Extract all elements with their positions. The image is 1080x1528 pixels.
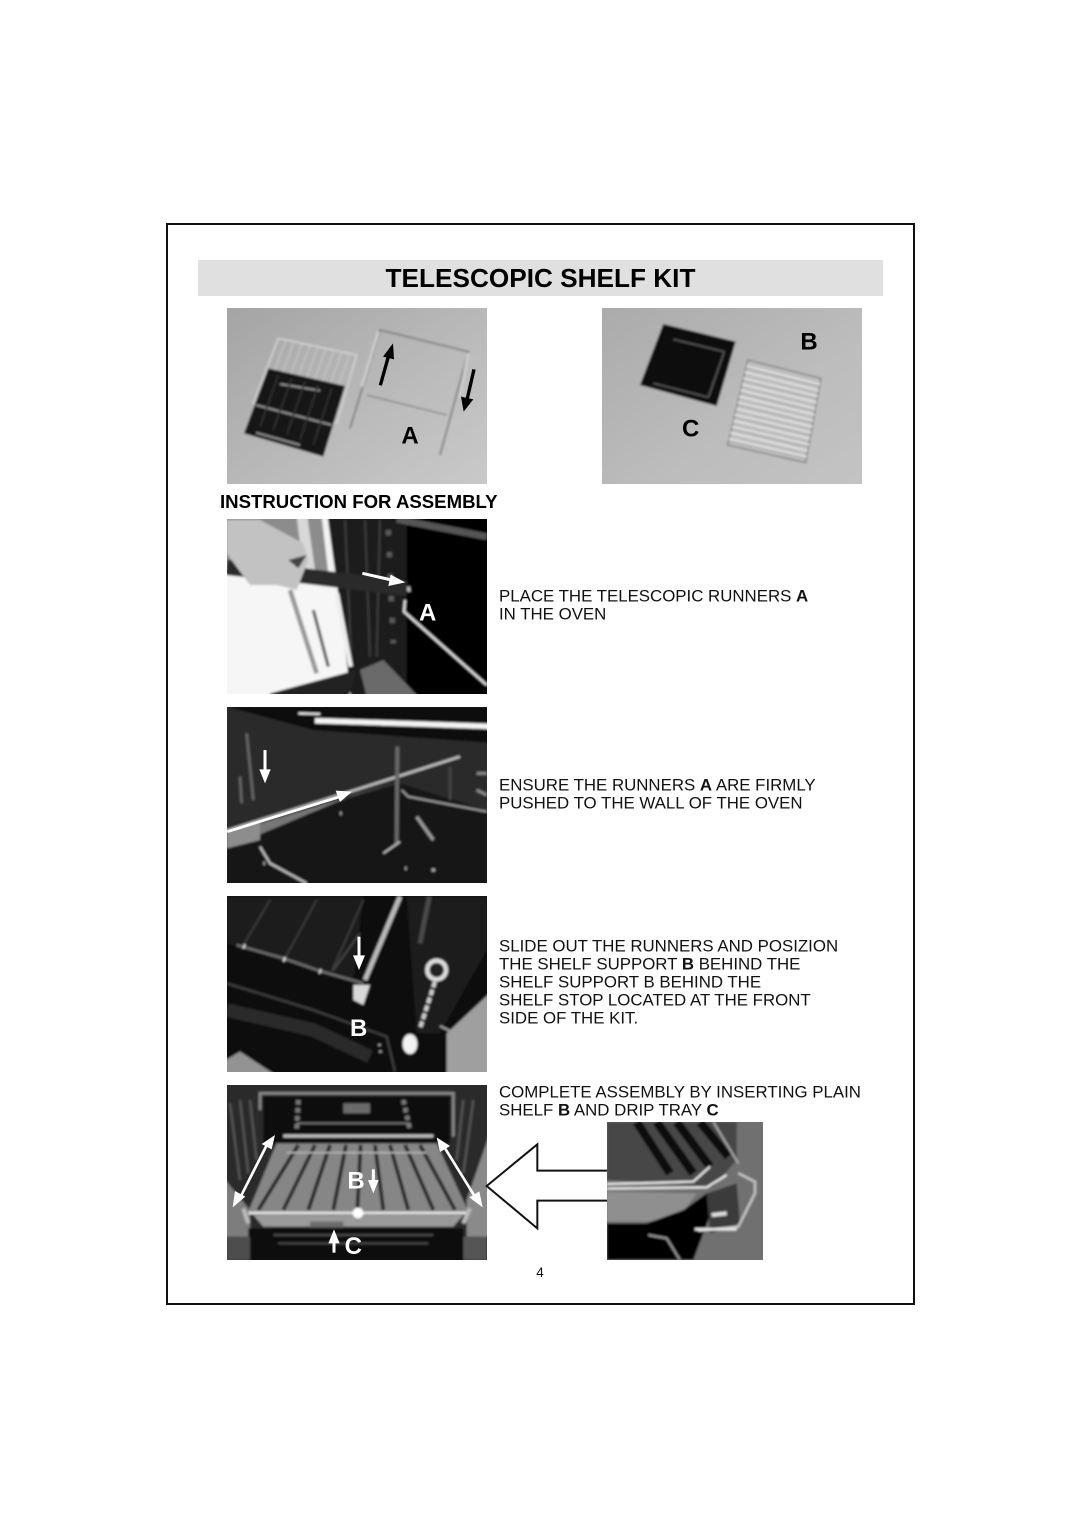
label A: A (419, 599, 436, 626)
text: step 3: SHELF SUPPORT B BEHIND THE (499, 973, 761, 992)
page number: 4 (536, 1265, 544, 1280)
photo: step 3 shelf support (227, 896, 487, 1072)
arrow: double left (233, 1135, 275, 1207)
arrow: white right (362, 573, 405, 586)
label A: A (401, 423, 419, 450)
text: step 4 (499, 1083, 861, 1120)
text: step 2 (499, 776, 816, 812)
arrow: white down (259, 750, 271, 783)
arrow: double right (437, 1137, 483, 1207)
text: step 1 (499, 586, 808, 624)
photo: kit with runners A (227, 308, 487, 484)
label B: B (350, 1015, 367, 1042)
text: step 1: PLACE THE TELESCOPIC RUNNERS A (499, 586, 808, 606)
photo: step 4 complete assembly (227, 1085, 487, 1260)
page border frame (167, 224, 914, 1304)
text: step 2: ENSURE THE RUNNERS A ARE FIRMLY (499, 776, 816, 794)
text: step 2: PUSHED TO THE WALL OF THE OVEN (499, 794, 803, 812)
title: TELESCOPIC SHELF KIT (386, 263, 695, 293)
photo: step 2 push runners (227, 707, 487, 883)
photo: step 1 place runners (227, 519, 487, 694)
text: step 4: COMPLETE ASSEMBLY BY INSERTING PLAIN (499, 1083, 861, 1102)
arrow: large outline pointing to oven (487, 1144, 613, 1228)
title band (198, 260, 883, 296)
subheading: INSTRUCTION FOR ASSEMBLY (220, 491, 498, 512)
arrow: white down (353, 937, 365, 970)
text: step 3: SIDE OF THE KIT. (499, 1009, 638, 1028)
arrow: down (461, 369, 474, 412)
text: step 4: SHELF B AND DRIP TRAY C (499, 1101, 719, 1120)
label B: B (347, 1168, 365, 1195)
photo: detail of shelf stop (607, 1122, 763, 1260)
text: step 3: THE SHELF SUPPORT B BEHIND THE (499, 955, 800, 974)
text: step 3 (499, 937, 838, 1028)
label B: B (800, 329, 818, 356)
arrow: down to B (368, 1169, 379, 1193)
text: step 3: SLIDE OUT THE RUNNERS AND POSIZION (499, 937, 838, 956)
label C: C (682, 416, 699, 443)
text: step 1: IN THE OVEN (499, 604, 606, 624)
text: step 3: SHELF STOP LOCATED AT THE FRONT (499, 991, 811, 1010)
label C: C (345, 1233, 362, 1260)
arrow: up (380, 343, 394, 385)
arrow: white along rail (227, 791, 352, 832)
arrow: up to C (328, 1229, 340, 1253)
photo: shelf B and tray C (602, 308, 862, 484)
